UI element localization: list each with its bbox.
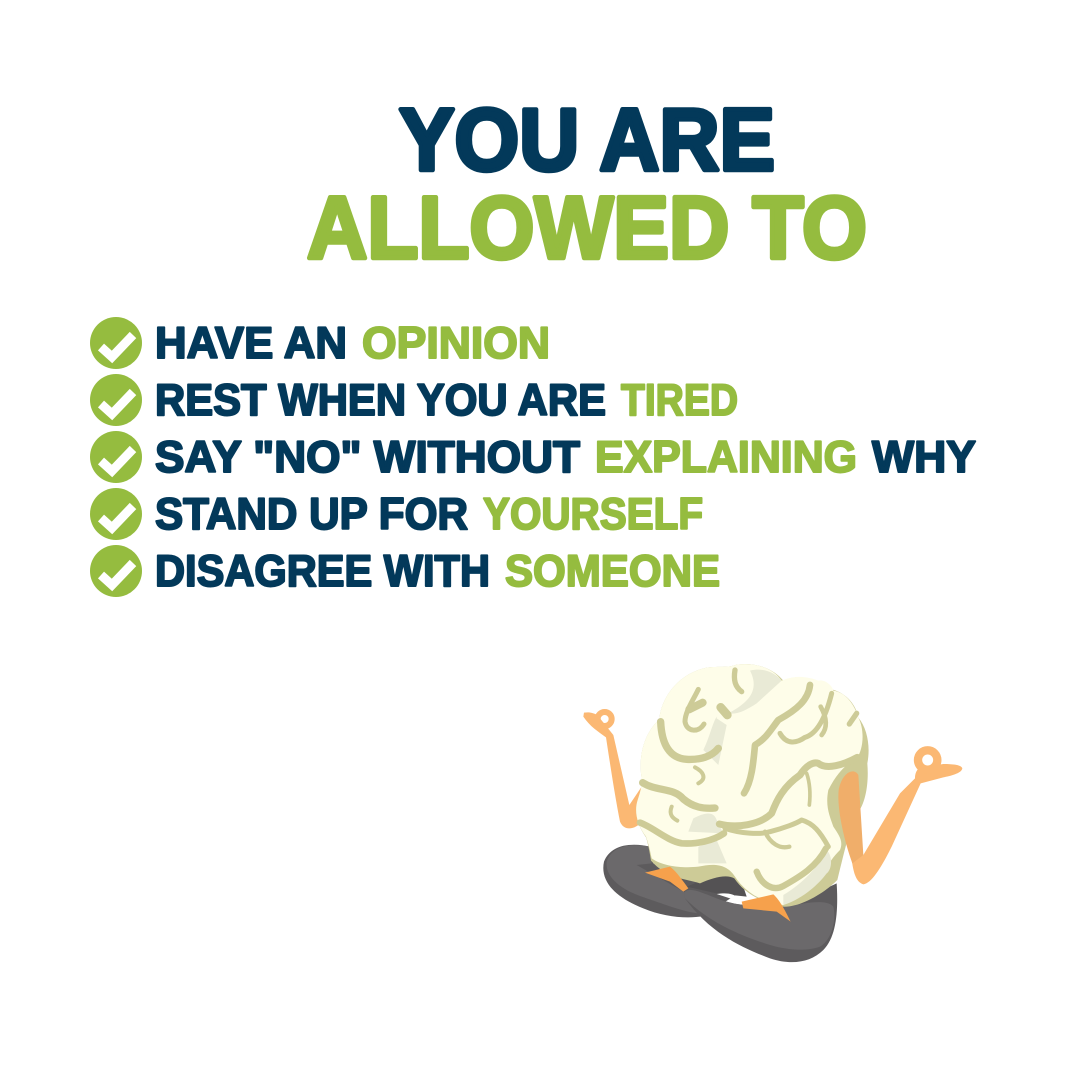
brain fold bands [640, 670, 857, 888]
item 5: disagree with someone: SOMEONE [505, 547, 720, 596]
title line: allowed to: ALLOWED TO [307, 178, 867, 277]
item 2: rest when you are tired: TIRED [621, 376, 738, 425]
left arm [583, 712, 642, 828]
brain cream fill [636, 664, 863, 905]
right upper arm overlay [838, 771, 863, 863]
item 4: stand up for yourself: STAND UP FOR [155, 490, 468, 539]
item 4: stand up for yourself [90, 488, 703, 540]
brain base shadow [636, 664, 869, 907]
item 1: have an opinion: OPINION [362, 319, 550, 368]
item 3: say no without explaining why: EXPLAINING [595, 433, 857, 482]
feet [645, 867, 791, 922]
item 3: say no without explaining why [90, 431, 976, 483]
title line: you are: YOU ARE [399, 90, 775, 189]
item 5: disagree with someone: DISAGREE WITH [155, 547, 490, 596]
item 5: disagree with someone [90, 545, 720, 597]
right arm [852, 750, 962, 884]
item 3: say no without explaining why: SAY "NO" WITHOUT [155, 433, 580, 482]
item 2: rest when you are tired [90, 374, 738, 426]
brain [636, 664, 869, 907]
item 2: rest when you are tired: REST WHEN YOU ARE [155, 376, 606, 425]
legs [603, 845, 837, 962]
item 3: say no without explaining why: WHY [872, 433, 976, 482]
illustration: meditating brain [583, 664, 962, 962]
item 4: stand up for yourself: YOURSELF [483, 490, 703, 539]
item 1: have an opinion [90, 317, 550, 369]
item 1: have an opinion: HAVE AN [155, 319, 347, 368]
checklist [90, 317, 976, 597]
brain mid tone folds [688, 670, 831, 905]
title [307, 90, 867, 277]
